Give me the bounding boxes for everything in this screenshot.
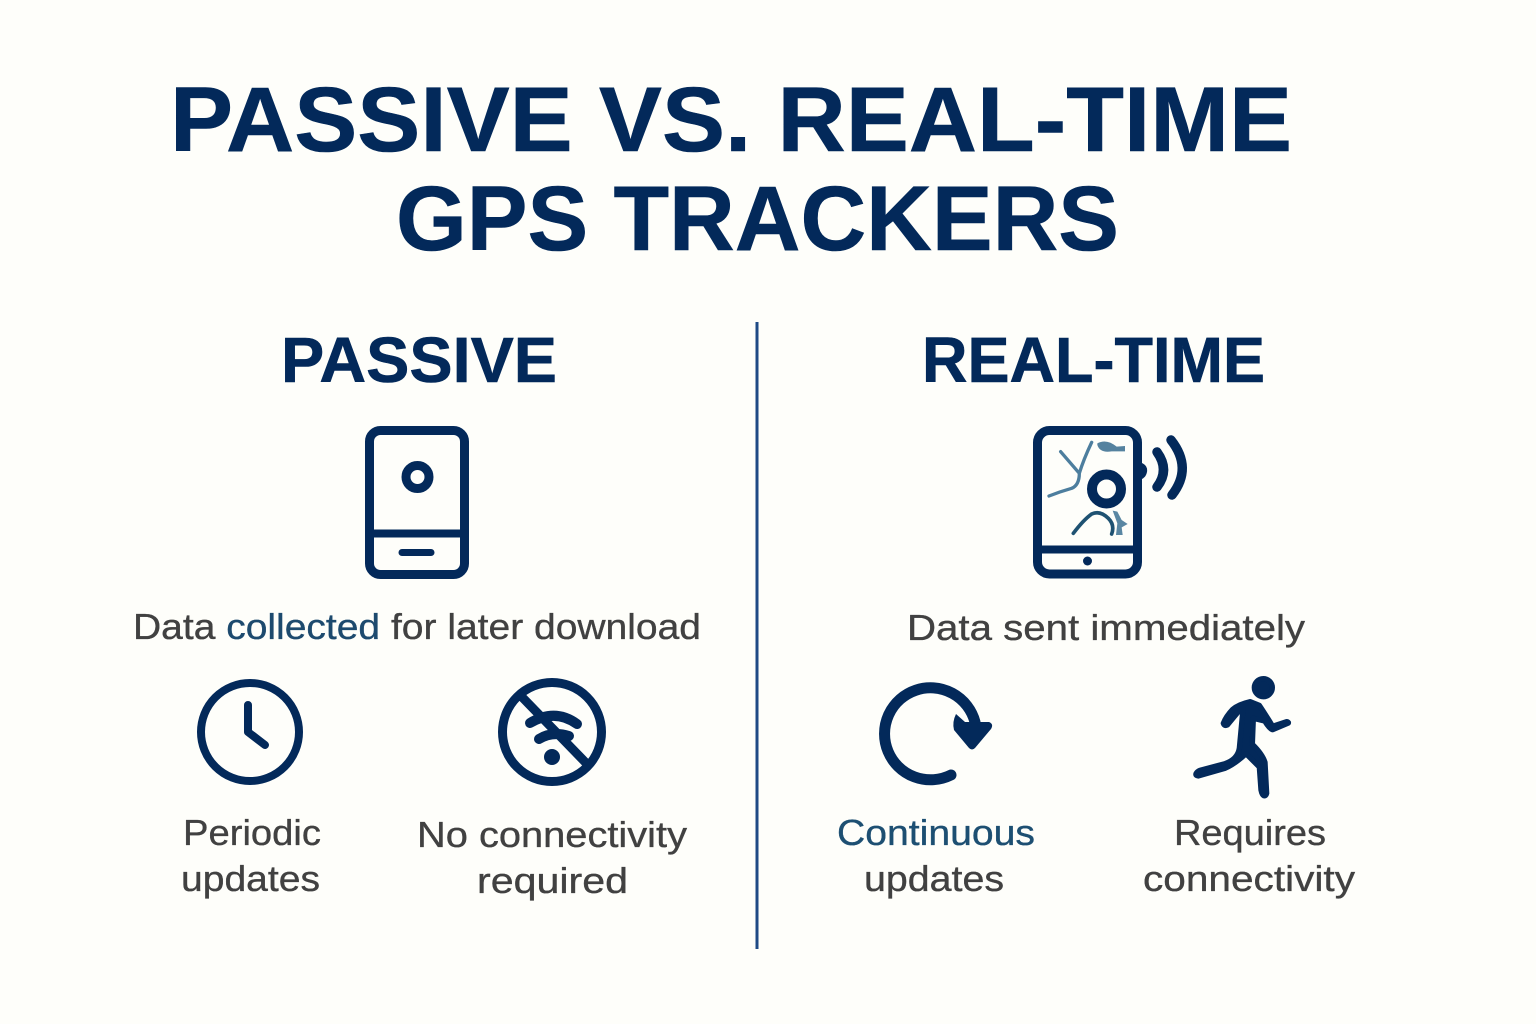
title: GPS TRACKERS bbox=[396, 168, 1119, 270]
icon: passive tracker device bbox=[369, 430, 465, 574]
label: periodic updates bbox=[181, 812, 321, 899]
center divider bbox=[756, 322, 758, 949]
icon: no wifi bbox=[502, 682, 602, 782]
title bbox=[170, 69, 1292, 270]
heading: real-time: REAL-TIME bbox=[922, 324, 1265, 396]
title: PASSIVE VS. REAL-TIME bbox=[170, 69, 1292, 171]
icon: real-time tracker with map and signal bbox=[1037, 430, 1182, 574]
label: requires connectivity bbox=[1143, 812, 1355, 899]
icon: continuous arrow bbox=[885, 688, 992, 780]
panel: passive bbox=[133, 324, 701, 901]
label: continuous updates: Continuous bbox=[837, 812, 1035, 853]
label: periodic updates: updates bbox=[181, 858, 320, 899]
label: requires connectivity: Requires bbox=[1174, 812, 1326, 853]
panel: real-time bbox=[837, 324, 1355, 899]
label: no connectivity required: required bbox=[477, 860, 628, 901]
icon: running person bbox=[1196, 679, 1288, 796]
text: data sent immediately: Data sent immediately bbox=[907, 607, 1305, 648]
label: continuous updates bbox=[837, 812, 1035, 899]
heading: passive: PASSIVE bbox=[281, 324, 557, 396]
label: requires connectivity: connectivity bbox=[1143, 858, 1355, 899]
label: no connectivity required: No connectivity bbox=[417, 814, 687, 855]
icon: clock bbox=[201, 683, 299, 781]
label: continuous updates: updates bbox=[864, 858, 1004, 899]
label: no connectivity required bbox=[417, 814, 687, 901]
text: data collected for later download: Data collected for later download bbox=[133, 606, 701, 647]
label: periodic updates: Periodic bbox=[183, 812, 321, 853]
